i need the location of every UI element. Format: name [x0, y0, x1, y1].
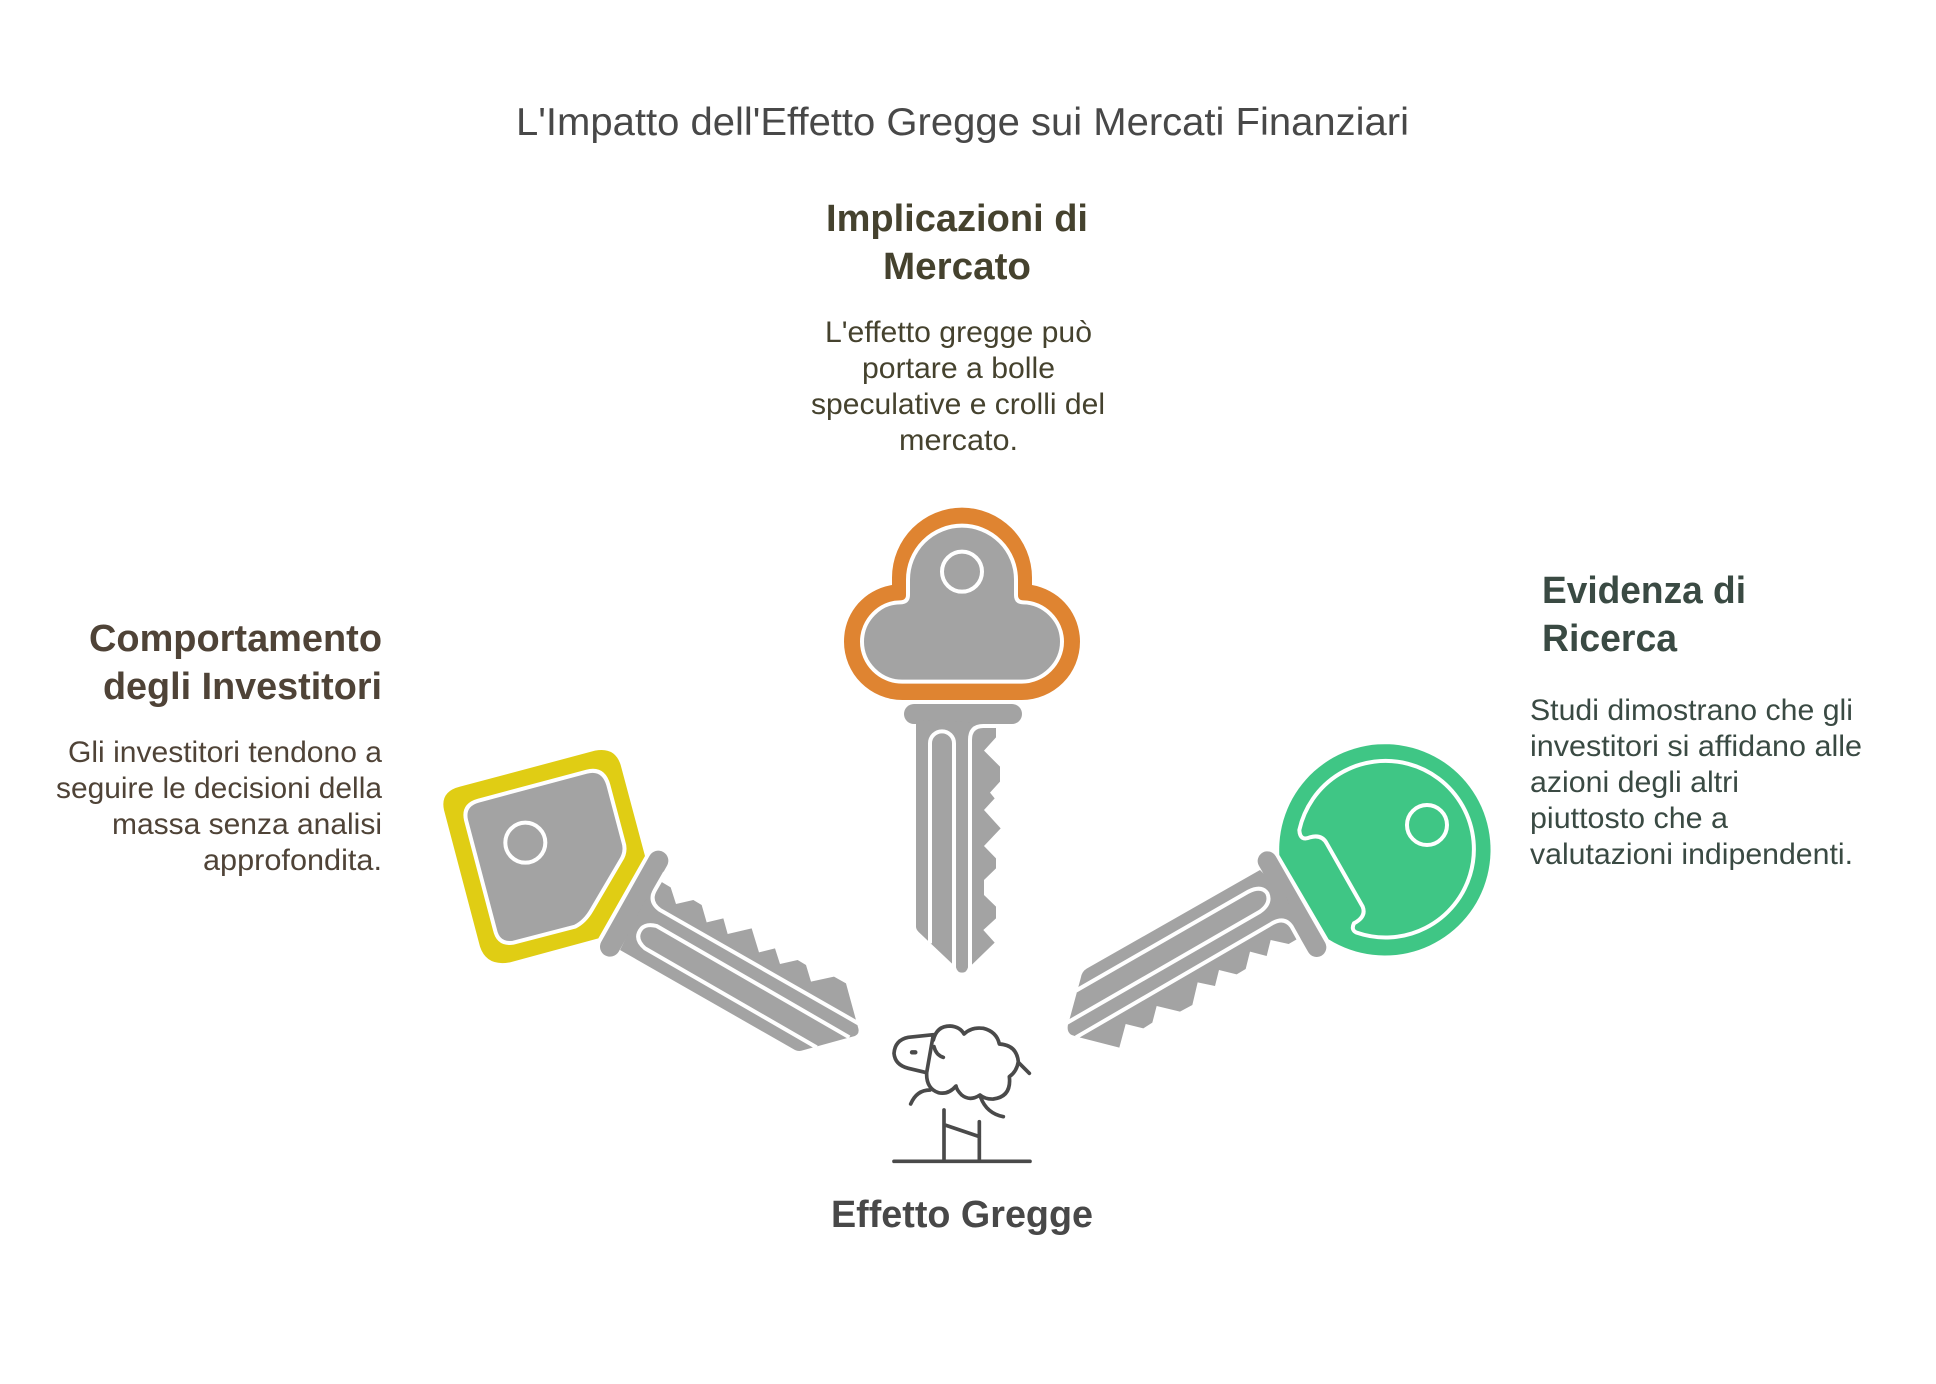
text block: investor behaviour description	[56, 736, 382, 877]
text block: market implications description: speculative e crolli del	[811, 388, 1105, 421]
heading: Comportamento degli Investitori: Comportamento	[89, 618, 382, 660]
heading: Implicazioni di Mercato	[826, 198, 1088, 288]
label: Effetto Gregge: Effetto Gregge	[831, 1194, 1093, 1236]
text block: research evidence description: piuttosto che a	[1530, 802, 1728, 835]
title: L'Impatto dell'Effetto Gregge sui Mercati Finanziari	[516, 101, 1409, 144]
icon: yellow pentagon-head key (left)	[443, 750, 859, 1051]
text block: investor behaviour description: massa senza analisi	[112, 808, 382, 841]
text block: market implications description: portare a bolle	[862, 352, 1055, 385]
text block: research evidence description: Studi dimostrano che gli	[1530, 694, 1853, 727]
text block: market implications description	[811, 316, 1105, 457]
text block: research evidence description	[1530, 694, 1862, 871]
panel: Implicazioni di Mercato text	[811, 198, 1105, 457]
heading: Comportamento degli Investitori: degli Investitori	[103, 666, 382, 708]
text block: investor behaviour description: Gli investitori tendono a	[68, 736, 382, 769]
text block: research evidence description: azioni degli altri	[1530, 766, 1739, 799]
icon: orange cloud-head key (top)	[844, 508, 1080, 973]
heading: Comportamento degli Investitori	[89, 618, 382, 708]
heading: Evidenza di Ricerca: Evidenza di	[1542, 570, 1746, 612]
icon: sheep on ground	[894, 1026, 1030, 1161]
text block: market implications description: mercato.	[899, 424, 1018, 457]
text block: investor behaviour description: seguire le decisioni della	[56, 772, 382, 805]
heading: Implicazioni di Mercato: Mercato	[883, 246, 1031, 288]
heading: Evidenza di Ricerca: Ricerca	[1542, 618, 1678, 660]
text block: research evidence description: investitori si affidano alle	[1530, 730, 1862, 763]
text block: market implications description: L'effetto gregge può	[825, 316, 1092, 349]
panel: Evidenza di Ricerca text	[1530, 570, 1862, 871]
text block: investor behaviour description: approfondita.	[203, 844, 382, 877]
heading: Implicazioni di Mercato: Implicazioni di	[826, 198, 1088, 240]
heading: Evidenza di Ricerca	[1542, 570, 1746, 660]
text block: research evidence description: valutazioni indipendenti.	[1530, 838, 1853, 871]
panel: Comportamento degli Investitori text	[56, 618, 382, 877]
icon: green round-head key (right)	[1066, 744, 1491, 1048]
